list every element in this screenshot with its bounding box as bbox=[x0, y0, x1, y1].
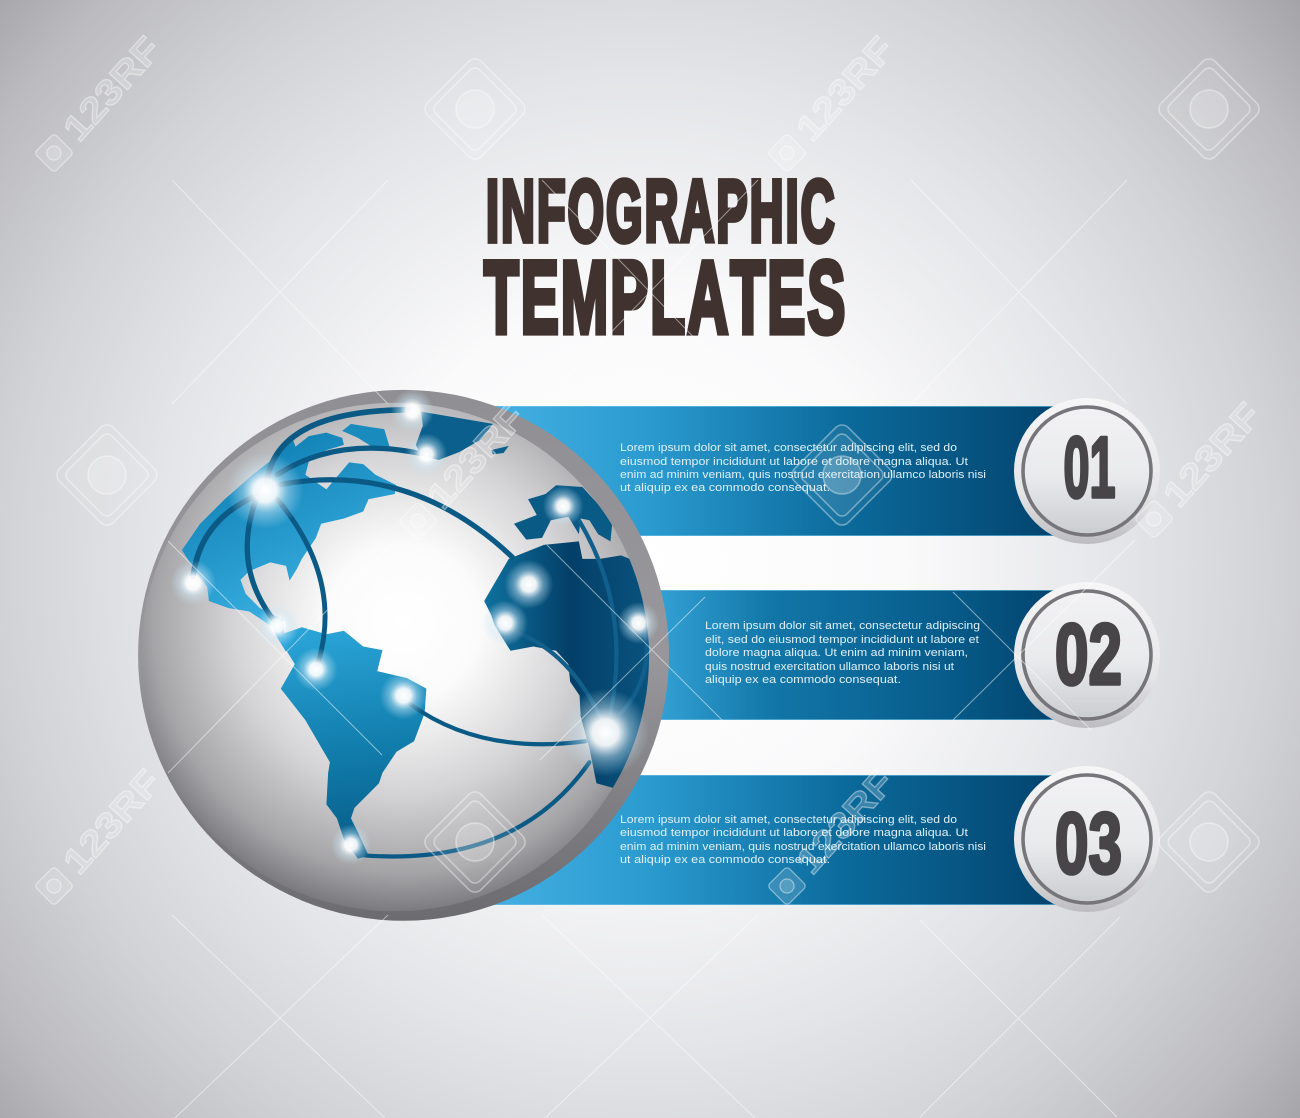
text block 01: eiusmod tempor incididunt ut labore et dolore magna aliqua. Ut bbox=[620, 456, 969, 468]
light nodes bbox=[170, 389, 660, 865]
panel: banner 01 bbox=[490, 406, 1065, 536]
watermark stamps bbox=[53, 55, 1263, 896]
North America bbox=[182, 433, 397, 630]
text block 01 bbox=[620, 442, 986, 494]
watermark labels: 123RF bbox=[55, 761, 169, 882]
title: INFOGRAPHIC bbox=[486, 162, 837, 259]
text block 01: ut aliquip ex ea commodo consequat. bbox=[620, 482, 830, 494]
text block 02 bbox=[705, 620, 980, 686]
text block 02: Lorem ipsum dolor sit amet, consectetur adipiscing bbox=[705, 620, 980, 632]
title: TEMPLATES bbox=[484, 241, 847, 355]
text block 02: aliquip ex ea commodo consequat. bbox=[705, 674, 901, 686]
Central America bbox=[270, 618, 302, 652]
badge 01: 01 bbox=[1064, 420, 1116, 516]
Greenland bbox=[416, 412, 493, 460]
watermark small cameras bbox=[34, 133, 1174, 906]
text block 02: elit, sed do eiusmod tempor incididunt ut labore et bbox=[705, 634, 980, 646]
globe bbox=[138, 389, 670, 921]
watermark labels: 123RF bbox=[419, 396, 533, 517]
watermark labels: 123RF bbox=[55, 28, 169, 149]
watermark labels bbox=[55, 28, 1269, 882]
badge 03: 03 bbox=[1055, 796, 1122, 892]
Africa and Asia bbox=[484, 541, 650, 788]
text block 03 bbox=[620, 814, 986, 866]
text block 01: enim ad minim veniam, quis nostrud exercitation ullamco laboris nisi bbox=[620, 469, 986, 481]
connection arcs bbox=[193, 410, 647, 856]
badge 01 bbox=[1014, 398, 1160, 544]
text block 02: dolore magna aliqua. Ut enim ad minim veniam, bbox=[705, 647, 968, 659]
South America bbox=[281, 627, 426, 859]
watermark labels: 123RF bbox=[1155, 394, 1269, 515]
Iceland bbox=[491, 446, 509, 454]
badge 02: 02 bbox=[1055, 607, 1122, 703]
text block 03: Lorem ipsum dolor sit amet, consectetur adipiscing elit, sed do bbox=[620, 814, 957, 826]
watermark labels: 123RF bbox=[788, 761, 902, 882]
text block 01: Lorem ipsum dolor sit amet, consectetur adipiscing elit, sed do bbox=[620, 442, 957, 454]
text block 03: enim ad minim veniam, quis nostrud exercitation ullamco laboris nisi bbox=[620, 841, 986, 853]
panel: banner 02 bbox=[600, 590, 1065, 720]
badge 02 bbox=[1014, 582, 1160, 728]
Arctic islands bbox=[342, 424, 390, 447]
watermark labels: 123RF bbox=[788, 28, 902, 149]
title bbox=[484, 162, 847, 355]
text block 03: ut aliquip ex ea commodo consequat. bbox=[620, 854, 830, 866]
badge 03 bbox=[1014, 766, 1160, 912]
text block 02: quis nostrud exercitation ullamco laboris nisi ut bbox=[705, 661, 955, 673]
continents bbox=[182, 412, 670, 859]
text block 03: eiusmod tempor incididunt ut labore et dolore magna aliqua. Ut bbox=[620, 827, 969, 839]
Europe bbox=[514, 485, 612, 541]
panel: banner 03 bbox=[490, 775, 1065, 905]
